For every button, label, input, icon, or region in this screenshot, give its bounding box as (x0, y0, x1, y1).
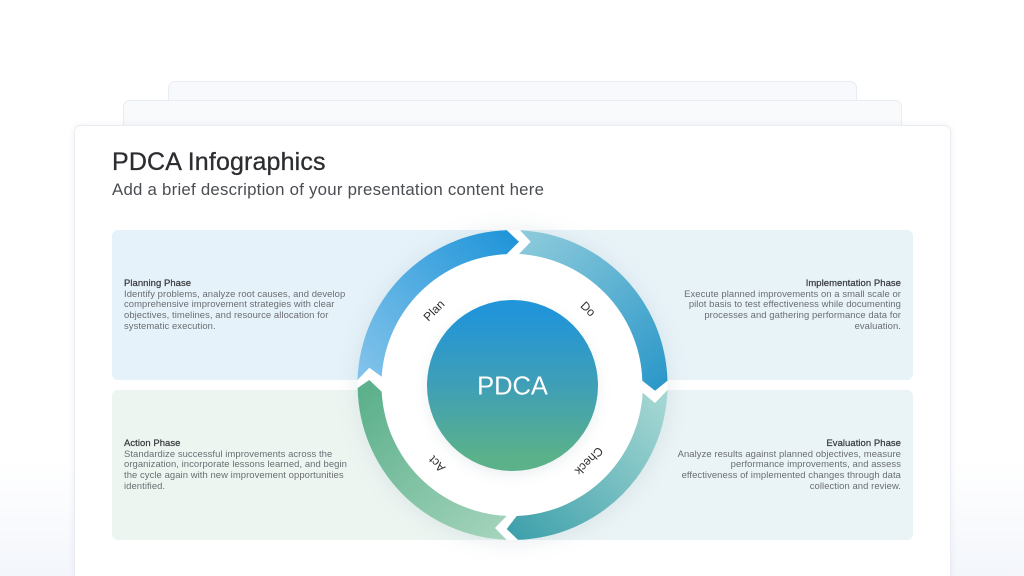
label: Plan: Plan (421, 297, 447, 324)
panel: evaluation (512, 390, 913, 540)
text: evaluation phase: Evaluation Phase (826, 438, 901, 449)
text: evaluation phase: effectiveness of implemented changes through data (682, 470, 901, 481)
center label: PDCA (477, 372, 548, 400)
middle card (122, 100, 902, 160)
text: implementation phase: evaluation. (855, 321, 901, 332)
text: implementation phase: processes and gathering performance data for (704, 310, 901, 321)
text: planning phase: systematic execution. (124, 321, 216, 332)
text: action phase: Standardize successful improvements across the (124, 448, 332, 460)
text: implementation phase: Implementation Phase (806, 278, 901, 289)
text: planning phase: Identify problems, analyze root causes, and develop (124, 288, 345, 300)
panel: planning (112, 230, 513, 380)
text: planning phase (124, 278, 345, 332)
text: planning phase: comprehensive improvement strategies with clear (124, 299, 334, 310)
text: implementation phase: pilot basis to test effectiveness while documenting (689, 299, 901, 310)
title: PDCA Infographics (112, 148, 326, 176)
arc: Do (519, 230, 668, 391)
label: Act: Act (425, 452, 448, 475)
inner shadow around center circle (428, 305, 598, 475)
text: implementation phase: Execute planned improvements on a small scale or (684, 288, 901, 300)
back card (168, 81, 856, 141)
text: evaluation phase (678, 438, 901, 492)
text: planning phase: objectives, timelines, and resource allocation for (124, 310, 328, 321)
text: action phase: Action Phase (124, 438, 180, 449)
text: action phase (124, 438, 347, 492)
arc: Act (358, 380, 507, 540)
text: evaluation phase: collection and review. (810, 481, 901, 492)
text: action phase: the cycle again with new improvement opportunities (124, 470, 344, 481)
subtitle: Add a brief description of your presentation content here (112, 180, 544, 199)
text: evaluation phase: Analyze results against planned objectives, measure (678, 448, 901, 460)
arc: Check (507, 390, 668, 540)
ring base disc (358, 230, 668, 540)
text: planning phase: Planning Phase (124, 278, 191, 289)
text: implementation phase (684, 278, 901, 332)
ring shadow (360, 233, 666, 539)
label: Check: Check (571, 444, 606, 479)
label: Do: Do (578, 299, 599, 320)
main card (74, 124, 950, 576)
panel: action (112, 390, 513, 540)
text: action phase: identified. (124, 481, 165, 492)
center circle (427, 300, 598, 471)
text: evaluation phase: performance improvements, and assess (731, 459, 901, 470)
panel: implementation (512, 230, 913, 380)
arc: Plan (358, 230, 519, 380)
text: action phase: organization, incorporate lessons learned, and begin (124, 459, 347, 470)
